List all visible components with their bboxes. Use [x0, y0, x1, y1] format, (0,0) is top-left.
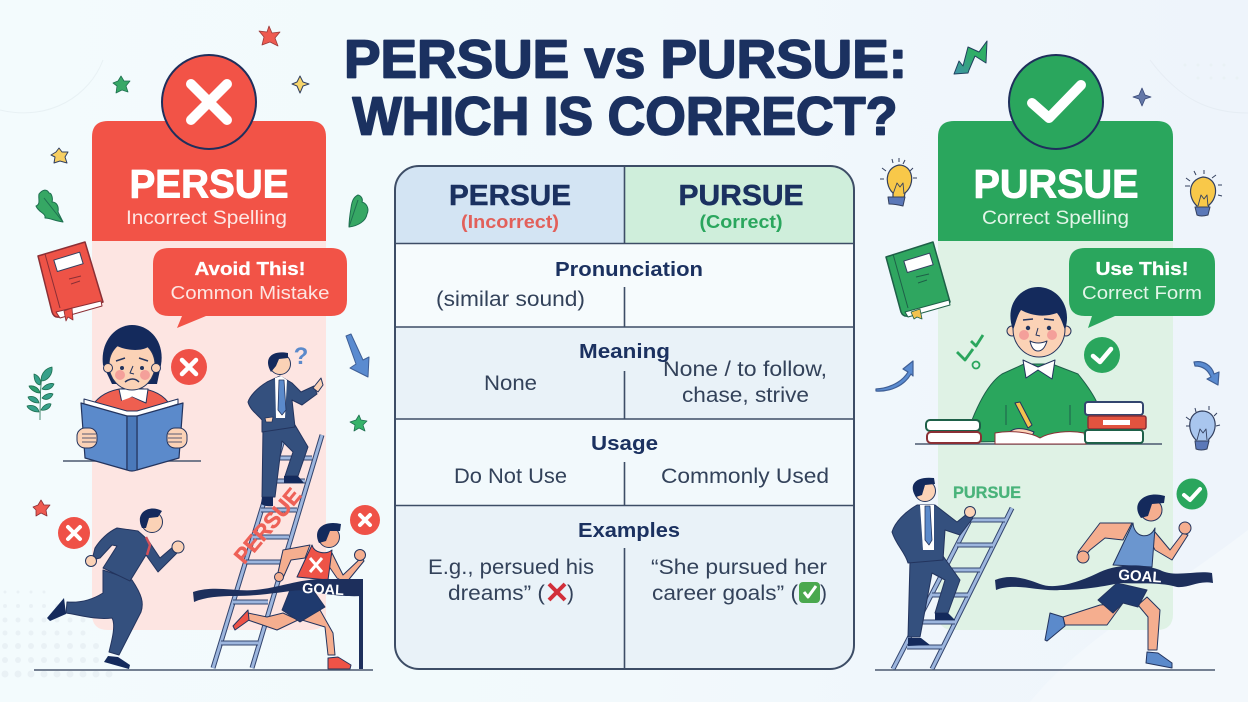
row: pronunciation — [436, 259, 703, 311]
icon: check badge by goal — [1176, 478, 1208, 510]
icon: leafy sprig — [27, 367, 54, 420]
panel header: PURSUE: Correct Spelling — [982, 208, 1129, 229]
panel header: PURSUE — [938, 121, 1173, 241]
row: meaning: Meaning — [579, 341, 670, 363]
table header: (Correct) — [700, 212, 782, 232]
finish ribbon: goal — [995, 565, 1213, 590]
icon: cross badge by runner — [58, 517, 90, 549]
callout: avoid this: Avoid This! — [194, 258, 306, 279]
ground line right — [875, 669, 1215, 671]
illustration: runner blue — [1045, 495, 1191, 668]
finish line: goal: GOAL — [302, 581, 344, 599]
icon: gold star — [51, 148, 68, 163]
row: usage: Do Not Use — [454, 465, 567, 488]
question mark: ? — [294, 343, 308, 370]
callout: avoid this — [153, 248, 347, 328]
table header: (Incorrect) — [461, 212, 559, 232]
icon: red star lower — [33, 500, 50, 516]
panel header: PERSUE: Incorrect Spelling — [126, 208, 287, 229]
icon: check emoji — [799, 582, 820, 603]
title: WHICH IS CORRECT? — [352, 86, 898, 146]
illustration: man on ladder — [248, 343, 323, 506]
callout: avoid this: Common Mistake — [170, 283, 330, 303]
label: PURSUE on ladder: PURSUE — [953, 483, 1021, 502]
table header: PURSUE — [678, 180, 804, 212]
row: examples: career goals” ( — [652, 582, 798, 605]
icon: red star top — [259, 26, 280, 46]
panel header: PURSUE: PURSUE — [974, 162, 1138, 206]
illustration: happy boy studying — [915, 287, 1162, 444]
row: examples: ) — [820, 582, 827, 605]
callout: use this: Correct Form — [1082, 283, 1202, 303]
ladder label: PERSUE — [229, 483, 306, 568]
icon: blue arrow down — [346, 334, 369, 377]
icon: cross badge by goal — [350, 505, 380, 535]
icon: gold sparkle — [292, 76, 309, 93]
icon: light bulb blue — [1186, 406, 1220, 450]
row: examples: ) — [567, 582, 574, 605]
illustration: ladder persue — [213, 435, 322, 668]
row: meaning: chase, strive — [682, 384, 809, 407]
panel header: PERSUE — [92, 121, 326, 241]
icon: navy sparkle — [1133, 88, 1151, 106]
icon: cross emoji — [549, 584, 565, 600]
title: PERSUE vs PURSUE: — [344, 30, 907, 90]
row: pronunciation: Pronunciation — [555, 259, 703, 281]
panel: PERSUE incorrect — [92, 55, 347, 630]
illustration: sad boy reading — [63, 325, 201, 471]
icon: teal zig-zag arrow — [954, 41, 987, 74]
row: pronunciation: (similar sound) — [436, 288, 585, 311]
icon: cross badge by boy — [171, 349, 207, 385]
icon: blue arrow curved down — [1194, 362, 1219, 385]
row: meaning: None / to follow, — [663, 358, 827, 381]
stack right — [1085, 402, 1146, 443]
icon: leaf left — [36, 190, 63, 222]
table header — [449, 180, 804, 232]
row: meaning: None — [484, 372, 537, 395]
row: examples: dreams” ( — [448, 582, 545, 605]
row: examples — [428, 520, 827, 605]
callout: use this — [1069, 248, 1215, 328]
title — [344, 30, 907, 146]
row: examples: Examples — [578, 520, 680, 542]
row: usage: Usage — [591, 433, 658, 455]
finish line: goal — [193, 579, 363, 669]
icon: green star right — [350, 415, 367, 431]
illustration: man with ladder — [892, 478, 976, 646]
finish ribbon: goal: GOAL — [1118, 567, 1162, 586]
callout: use this: Use This! — [1096, 258, 1188, 279]
icon: check badge by boy — [1084, 337, 1120, 373]
icon: green check badge — [1009, 55, 1103, 149]
icon: blue arrow curved up — [876, 361, 913, 391]
icon: light bulb yellow left — [880, 158, 917, 206]
row: examples: E.g., persued his — [428, 556, 594, 579]
icon: green star — [113, 76, 130, 93]
illustration: runner at goal — [233, 523, 366, 669]
open book — [995, 432, 1086, 444]
icon: red book — [38, 242, 103, 321]
icon: green book — [886, 242, 950, 319]
icon: red cross badge — [162, 55, 256, 149]
illustration: ladder pursue — [893, 508, 1012, 669]
stack left — [926, 420, 981, 443]
illustration: running man in suit — [47, 508, 184, 669]
icon: small checks — [957, 335, 983, 368]
row: usage: Commonly Used — [661, 465, 829, 488]
comparison table — [395, 166, 854, 669]
panel header: PERSUE: PERSUE — [130, 162, 288, 206]
row: usage — [454, 433, 829, 488]
panel: PURSUE correct — [938, 55, 1215, 630]
row: meaning — [484, 341, 827, 407]
icon: light bulb yellow right — [1185, 170, 1222, 216]
ground line left — [34, 669, 373, 671]
row: examples: “She pursued her — [651, 556, 827, 579]
table header: PERSUE — [449, 180, 571, 212]
icon: leaf right — [349, 195, 368, 227]
